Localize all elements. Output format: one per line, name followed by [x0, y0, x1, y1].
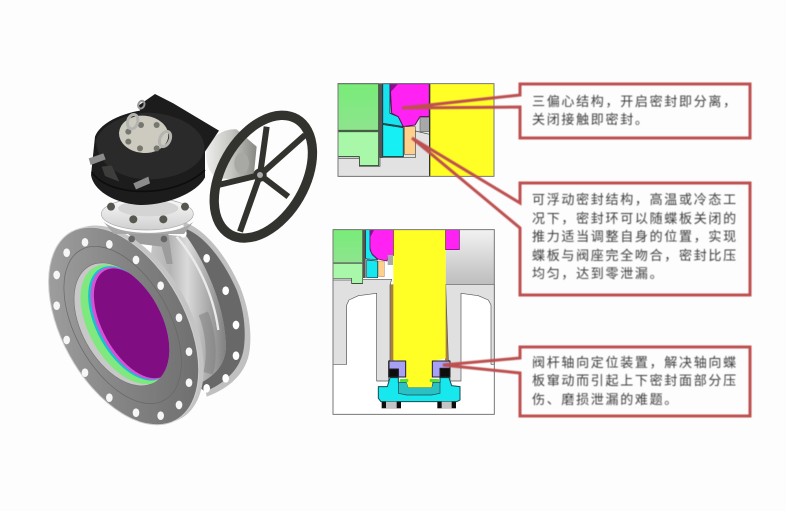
callout: axial locating device [443, 347, 750, 416]
yellow disc [430, 84, 494, 176]
right housing [446, 230, 494, 284]
green o-rings [400, 379, 408, 382]
callout text: floating seal: 均匀，达到零泄漏。 [532, 266, 664, 281]
upper section diagram [338, 84, 494, 176]
grey valve body [333, 279, 494, 381]
brown bearings [390, 284, 394, 360]
callout: floating seal [412, 138, 750, 295]
magenta disc seat [390, 84, 429, 127]
yellow stem [393, 230, 446, 387]
mounting yoke [101, 198, 193, 242]
callout: triple offset [402, 84, 750, 138]
callout text: floating seal: 可浮动密封结构，高温或冷态工 [532, 192, 738, 207]
peach sealing ring [404, 127, 415, 154]
grey packing [420, 117, 429, 132]
callout text: axial locating device [532, 355, 738, 407]
callout text: floating seal [532, 192, 738, 281]
green seat parts [338, 84, 379, 166]
gearbox [89, 94, 219, 205]
cap bolts [382, 402, 456, 408]
callout text: axial locating device: 伤、磨损泄漏的难题。 [532, 392, 679, 407]
cyan retainer [366, 230, 378, 278]
stem end [406, 378, 432, 387]
lower section diagram [333, 230, 494, 414]
adjusting bolts [89, 153, 106, 165]
front flange [18, 200, 235, 450]
callout text: axial locating device: 板窜动而引起上下密封面部分压 [532, 373, 738, 388]
cyan end cap [378, 378, 460, 402]
valve bore with sealing rings and purple disc [74, 262, 170, 386]
valve illustration [48, 94, 318, 426]
magenta seats [370, 230, 393, 261]
peach ring [378, 261, 384, 277]
green seat parts [333, 230, 363, 283]
gear shaft tube [206, 129, 257, 180]
callout text: floating seal: 况下，密封环可以随蝶板关闭的 [532, 211, 738, 226]
top plate [117, 114, 170, 155]
callout text: triple offset: 三偏心结构，开启密封即分离， [532, 94, 738, 109]
bolt holes [53, 238, 192, 420]
callout text: floating seal: 推力适当调整自身的位置，实现 [532, 229, 738, 244]
callout text: triple offset [532, 94, 738, 127]
cyan seal retainer [383, 84, 403, 157]
axial locating device [389, 361, 450, 377]
rear flange [140, 222, 250, 397]
neck and rib [127, 233, 173, 264]
handwheel [194, 98, 333, 255]
callout text: axial locating device: 阀杆轴向定位装置，解决轴向蝶 [532, 355, 738, 370]
lifting eye bolts [126, 113, 139, 130]
callout text: triple offset: 关闭接触即密封。 [532, 112, 650, 127]
callout text: floating seal: 蝶板与阀座完全吻合，密封比压 [532, 248, 738, 263]
